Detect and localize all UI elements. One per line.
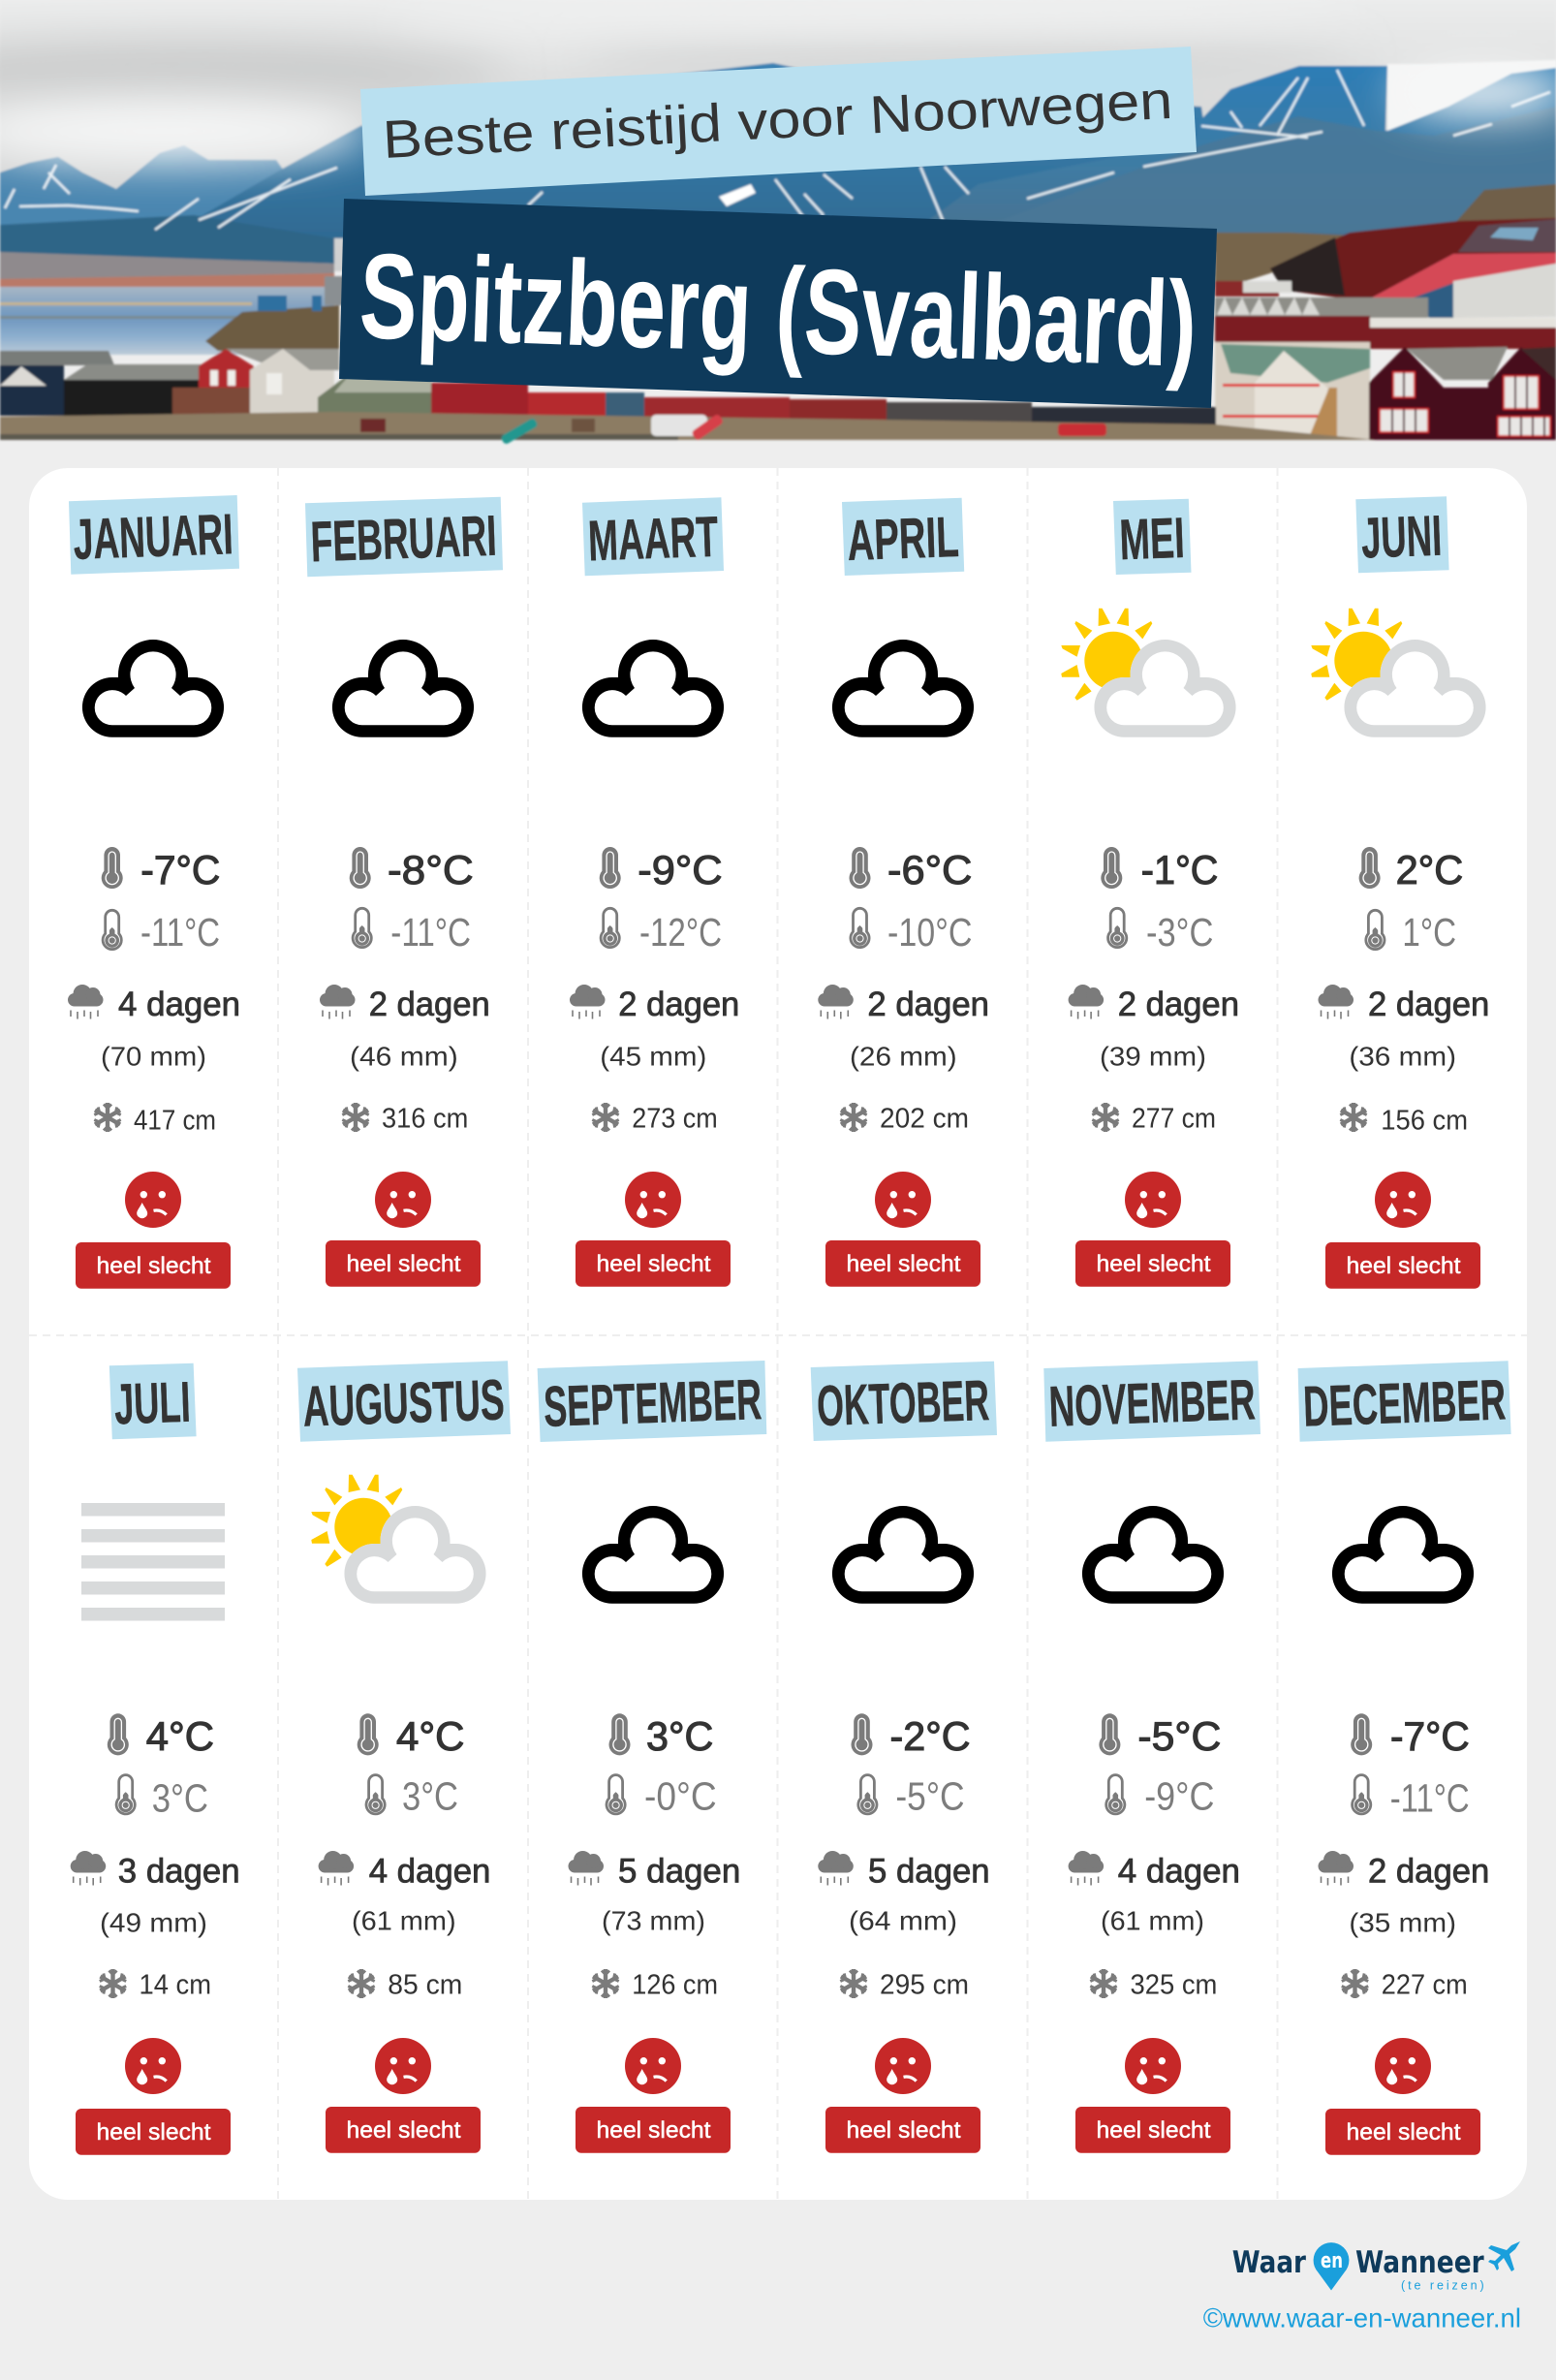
heading: oktober: OKTOBER	[816, 1368, 990, 1438]
snow depth: 202 cm	[880, 1103, 969, 1134]
low temperature	[607, 1773, 717, 1818]
heading: april	[842, 498, 964, 576]
high temperature	[102, 847, 220, 892]
high temperature: -2°C	[889, 1713, 971, 1759]
low temperature	[1366, 910, 1456, 955]
snow depth: 156 cm	[1381, 1106, 1468, 1137]
icon: cloud	[832, 1506, 974, 1604]
low temperature	[1108, 908, 1213, 955]
logo: Waar en Wanneer	[1232, 2241, 1520, 2293]
rain days: 5 dagen	[868, 1852, 990, 1890]
header photo: Longyearbyen landscape	[0, 0, 1556, 445]
rain days	[1069, 1851, 1240, 1890]
low temperature: -3°C	[1146, 910, 1213, 955]
low temperature	[1353, 1775, 1470, 1820]
snow depth	[840, 1103, 969, 1134]
subtitle text: Beste reistijd voor Noorwegen	[381, 70, 1174, 170]
low temperature	[1106, 1773, 1214, 1818]
low temperature: -11°C	[1390, 1775, 1470, 1820]
rating: heel slecht	[347, 1251, 461, 1277]
snow depth: 85 cm	[388, 1970, 462, 2001]
rainfall: (64 mm)	[849, 1905, 957, 1935]
high temperature: -7°C	[1390, 1713, 1470, 1759]
low temperature: -10°C	[887, 910, 972, 955]
snow depth	[1092, 1103, 1216, 1134]
rainfall: (35 mm)	[1349, 1907, 1456, 1937]
low temperature: -0°C	[644, 1773, 717, 1818]
rating	[76, 2038, 231, 2155]
heading: maart	[582, 497, 724, 576]
rating: heel slecht	[847, 1251, 961, 1277]
rain days: 4 dagen	[118, 986, 240, 1023]
panel: april	[818, 498, 989, 1287]
rain days	[570, 985, 739, 1023]
rating: heel slecht	[597, 2117, 711, 2144]
heading: augustus: AUGUSTUS	[301, 1367, 506, 1439]
icon: sun behind cloud	[311, 1475, 486, 1604]
copyright url: ©www.waar-en-wanneer.nl	[1203, 2303, 1521, 2333]
high temperature: -6°C	[887, 847, 972, 892]
logo: Waar en Wanneer: Waar	[1232, 2245, 1307, 2280]
panel: juni	[1311, 496, 1489, 1289]
icon: fog	[81, 1503, 225, 1620]
panel: februari	[305, 497, 503, 1287]
snow depth: 126 cm	[632, 1970, 718, 2001]
high temperature: -8°C	[388, 847, 474, 892]
heading: juli: JULI	[113, 1370, 192, 1436]
snow depth	[1090, 1969, 1217, 2001]
rain days	[1069, 985, 1239, 1023]
logo: Waar en Wanneer: (te reizen)	[1401, 2279, 1484, 2293]
high temperature: -7°C	[140, 847, 220, 892]
snow depth: 277 cm	[1132, 1103, 1216, 1134]
heading: juni	[1355, 496, 1449, 573]
banner: title	[339, 199, 1217, 408]
snow depth	[342, 1103, 468, 1134]
rainfall: (61 mm)	[1101, 1905, 1204, 1935]
rating: heel slecht	[97, 2119, 211, 2145]
low temperature	[366, 1773, 458, 1818]
rainfall: (61 mm)	[352, 1905, 456, 1935]
icon: airplane	[1488, 2241, 1520, 2271]
high temperature	[849, 847, 972, 892]
heading: april: APRIL	[846, 505, 960, 573]
rain days	[68, 985, 240, 1023]
snow depth	[94, 1103, 216, 1137]
rating: heel slecht	[97, 1253, 211, 1279]
heading: november: NOVEMBER	[1047, 1367, 1257, 1439]
rain days: 2 dagen	[1368, 1852, 1489, 1890]
high temperature: 4°C	[146, 1713, 214, 1759]
high temperature	[1101, 847, 1218, 892]
low temperature: 1°C	[1402, 910, 1456, 955]
title text: Spitzberg (Svalbard)	[358, 229, 1198, 392]
low temperature	[858, 1773, 965, 1818]
heading: mei	[1113, 499, 1192, 575]
rain days: 4 dagen	[369, 1852, 490, 1890]
heading: februari: FEBRUARI	[309, 504, 498, 574]
rain days: 5 dagen	[618, 1852, 740, 1890]
rain days: 4 dagen	[1118, 1852, 1240, 1890]
snow depth	[592, 1969, 718, 2001]
rating: heel slecht	[847, 2117, 961, 2144]
high temperature	[350, 847, 474, 892]
panel: white calendar card	[29, 468, 1527, 2200]
rain days	[1318, 1851, 1489, 1890]
rating	[76, 1172, 231, 1289]
rain days	[1318, 985, 1489, 1023]
high temperature	[1359, 847, 1463, 892]
icon: sun behind cloud	[1311, 609, 1486, 737]
snow depth: 14 cm	[140, 1970, 211, 2001]
snow depth: 295 cm	[880, 1970, 969, 2001]
panel: mei	[1061, 499, 1239, 1287]
high temperature	[851, 1713, 971, 1759]
rainfall: (45 mm)	[600, 1041, 706, 1071]
high temperature	[108, 1713, 214, 1759]
rain days	[818, 985, 989, 1023]
heading: februari	[305, 497, 503, 577]
snow depth: 273 cm	[632, 1103, 718, 1134]
icon: cloud	[582, 1506, 724, 1604]
rating	[825, 1172, 980, 1287]
rating	[1325, 2038, 1480, 2155]
panel: november	[1043, 1361, 1260, 2153]
snow depth: 325 cm	[1130, 1970, 1217, 2001]
low temperature: -12°C	[639, 910, 722, 955]
icon: cloud	[82, 640, 224, 737]
rainfall: (36 mm)	[1349, 1041, 1456, 1071]
rain days: 2 dagen	[1368, 986, 1489, 1023]
high temperature	[358, 1713, 464, 1759]
rain days	[320, 985, 490, 1023]
heading: januari	[69, 495, 239, 575]
panel: januari	[68, 495, 240, 1289]
high temperature	[608, 1713, 713, 1759]
rain days: 3 dagen	[118, 1852, 240, 1890]
rating: heel slecht	[1347, 1253, 1461, 1279]
rating	[1325, 1172, 1480, 1289]
snow depth	[100, 1969, 211, 2001]
high temperature: 2°C	[1396, 847, 1463, 892]
snow depth	[1342, 1969, 1468, 2001]
rating	[326, 1172, 481, 1287]
high temperature	[1351, 1713, 1470, 1759]
low temperature	[353, 908, 471, 955]
rating: heel slecht	[1097, 1251, 1211, 1277]
rain days: 2 dagen	[369, 986, 490, 1023]
icon: cloud	[1082, 1506, 1224, 1604]
low temperature: -9°C	[1144, 1773, 1214, 1818]
heading: oktober	[811, 1362, 997, 1441]
heading: augustus	[297, 1361, 511, 1442]
rainfall: (49 mm)	[100, 1907, 207, 1937]
rain days	[71, 1851, 240, 1890]
heading: mei: MEI	[1118, 506, 1186, 572]
heading: januari: JANUARI	[72, 502, 234, 572]
rating	[576, 2038, 731, 2153]
rating	[1075, 2038, 1230, 2153]
high temperature: -1°C	[1141, 847, 1218, 892]
banner: subtitle	[360, 47, 1197, 196]
high temperature: -9°C	[638, 847, 723, 892]
rainfall: (26 mm)	[850, 1041, 957, 1071]
snow depth	[592, 1103, 718, 1134]
icon: map pin: en	[1321, 2249, 1343, 2273]
snow depth	[840, 1969, 969, 2001]
heading: september: SEPTEMBER	[543, 1367, 762, 1439]
panel: oktober	[811, 1362, 997, 2153]
icon: cloud	[582, 640, 724, 737]
low temperature: -5°C	[895, 1773, 965, 1818]
rain days	[319, 1851, 490, 1890]
rating	[326, 2038, 481, 2153]
rain days	[818, 1851, 990, 1890]
rain days: 2 dagen	[867, 986, 989, 1023]
rating	[576, 1172, 731, 1287]
snow depth	[1340, 1103, 1468, 1137]
high temperature: -5°C	[1137, 1713, 1221, 1759]
panel: augustus	[297, 1361, 511, 2153]
rating: heel slecht	[1097, 2117, 1211, 2144]
heading: maart: MAART	[587, 505, 719, 573]
low temperature	[103, 910, 220, 955]
snow depth: 316 cm	[382, 1103, 468, 1134]
snow depth: 227 cm	[1382, 1970, 1468, 2001]
rain days: 2 dagen	[618, 986, 739, 1023]
icon: cloud	[332, 640, 474, 737]
rating: heel slecht	[347, 2117, 461, 2144]
low temperature	[601, 908, 722, 955]
rating	[1075, 1172, 1230, 1287]
snow depth: 417 cm	[134, 1106, 216, 1137]
heading: september	[538, 1361, 766, 1442]
rating: heel slecht	[1347, 2119, 1461, 2145]
rainfall: (46 mm)	[350, 1041, 458, 1071]
panel: juli	[71, 1363, 240, 2155]
rain days: 2 dagen	[1118, 986, 1239, 1023]
panel: september	[538, 1361, 766, 2153]
high temperature: 4°C	[396, 1713, 464, 1759]
icon: map pin	[1314, 2242, 1349, 2291]
snow depth	[348, 1969, 462, 2001]
low temperature: -11°C	[140, 910, 220, 955]
low temperature: 3°C	[152, 1775, 208, 1820]
high temperature	[1099, 1713, 1221, 1759]
high temperature: 3°C	[646, 1713, 713, 1759]
panel: december	[1298, 1361, 1511, 2155]
rainfall: (39 mm)	[1100, 1041, 1206, 1071]
low temperature	[116, 1775, 208, 1820]
rain days	[568, 1851, 740, 1890]
logo: Waar en Wanneer: Wanneer	[1355, 2245, 1484, 2280]
icon: sun behind cloud	[1061, 609, 1236, 737]
heading: juli	[109, 1363, 197, 1439]
rating	[825, 2038, 980, 2153]
icon: cloud	[1332, 1506, 1474, 1604]
rainfall: (73 mm)	[602, 1905, 705, 1935]
high temperature	[600, 847, 723, 892]
low temperature: -11°C	[390, 910, 471, 955]
rating: heel slecht	[597, 1251, 711, 1277]
rainfall: (70 mm)	[101, 1041, 206, 1071]
panel: maart	[570, 497, 739, 1287]
low temperature	[851, 908, 972, 955]
heading: juni: JUNI	[1360, 504, 1443, 570]
icon: cloud	[832, 640, 974, 737]
low temperature: 3°C	[402, 1773, 458, 1818]
heading: november	[1043, 1361, 1260, 1442]
